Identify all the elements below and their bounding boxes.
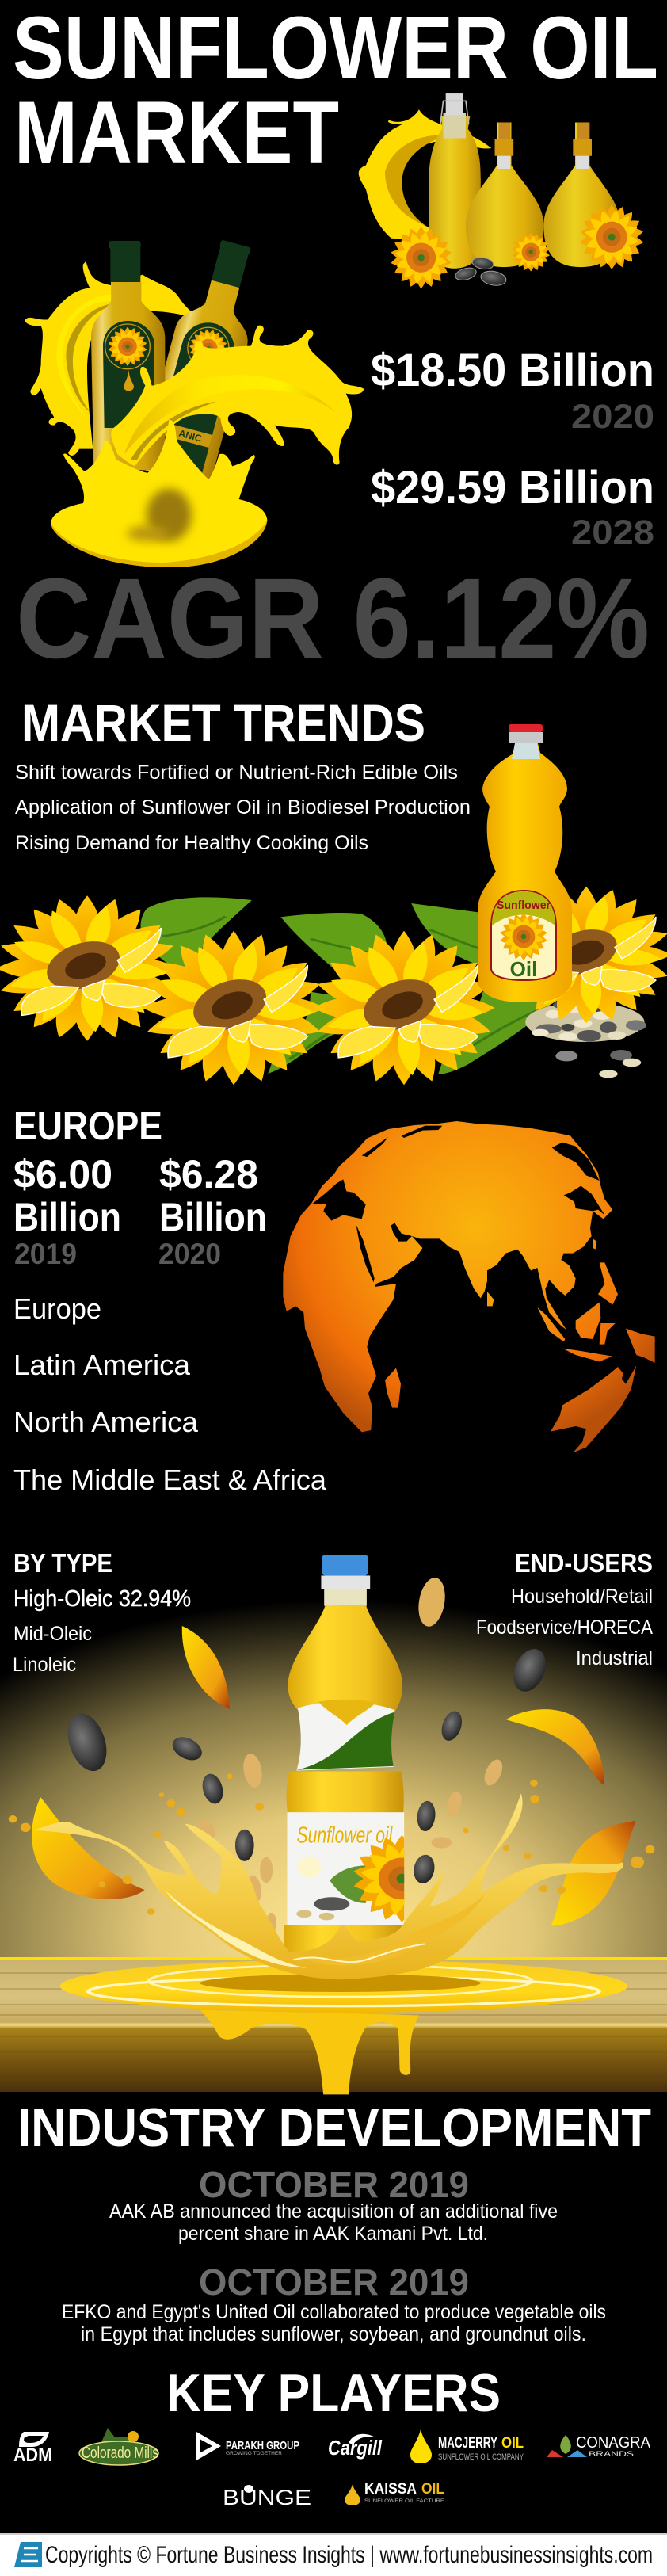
oil pool, drips and splash (34, 1793, 627, 2094)
seeds (61, 1645, 551, 1884)
plastic oil bottle (478, 724, 572, 1002)
bottle 1 (429, 93, 481, 269)
sunflowers (390, 205, 644, 288)
Europe value 2019 (13, 1152, 121, 1270)
logo: Colorado Mills: Colorado Mills (82, 2444, 158, 2462)
market trends list: Application of Sunflower Oil in Biodiesel Production (15, 796, 471, 819)
wooden table (0, 1957, 667, 2092)
by type segment: BY TYPE (13, 1548, 112, 1578)
market trends list: Rising Demand for Healthy Cooking Oils (15, 832, 368, 854)
region list: The Middle East & Africa (13, 1464, 327, 1496)
Europe value 2019: $6.00 (13, 1152, 112, 1196)
first bottle (91, 241, 165, 470)
oil pool (60, 1960, 627, 2013)
heading: key players: KEY PLAYERS (166, 2363, 501, 2423)
logo: MacJerry Oil: OIL (501, 2435, 524, 2452)
footer (0, 2533, 667, 2576)
seed pile (525, 997, 646, 1078)
logo: Kaissa Oil: OIL (421, 2481, 444, 2498)
region list (13, 1292, 327, 1496)
logo: Conagra Brands: CONAGRA (576, 2434, 651, 2452)
second bottle (138, 234, 272, 487)
market size 2020: 2020 (571, 398, 654, 436)
seeds (454, 256, 507, 288)
development 1: AAK AB announced the acquisition of an additional five (109, 2200, 558, 2223)
Sri Lanka and South East Asian islands (487, 1238, 655, 1363)
region list: Latin America (13, 1349, 191, 1381)
logo: Kaissa Oil (345, 2481, 444, 2505)
globe (283, 1121, 655, 1452)
end-users segment: Industrial (576, 1647, 653, 1670)
development 1 (109, 2164, 558, 2245)
logo: Conagra Brands (547, 2434, 651, 2458)
market size 2028 (371, 462, 654, 551)
bottle 3 (543, 122, 620, 267)
plastic bottle: Sunflower oil (297, 1822, 393, 1848)
logo: MacJerry Oil: SUNFLOWER OIL COMPANY (438, 2452, 524, 2462)
logo: Parakh Group: GROWING TOGETHER (226, 2452, 283, 2456)
Europe value 2019: Billion (13, 1195, 121, 1239)
market size 2020: $18.50 Billion (371, 345, 654, 396)
flowers (494, 882, 667, 1027)
development 2: in Egypt that includes sunflower, soybean, and groundnut oils. (81, 2323, 586, 2345)
logo: Parakh Group (196, 2432, 299, 2460)
logo: Colorado Mills (79, 2428, 158, 2465)
Europe value 2020: Billion (159, 1195, 267, 1239)
by type segment (13, 1548, 191, 1676)
logo: Parakh Group: PARAKH GROUP (226, 2439, 299, 2452)
heading: market trends: MARKET TRENDS (21, 693, 425, 752)
by type segment: High-Oleic 32.94% (13, 1586, 191, 1612)
logo: Kaissa Oil: KAISSA (364, 2481, 417, 2498)
Europe value 2020: $6.28 (159, 1152, 258, 1196)
market trends list: Shift towards Fortified or Nutrient-Rich Edible Oils (15, 761, 458, 784)
splash arc (111, 326, 364, 466)
logo: MacJerry Oil (410, 2429, 524, 2463)
logo: ADM (13, 2432, 52, 2466)
development 2 (62, 2261, 606, 2345)
regional heading: Europe: EUROPE (13, 1104, 162, 1148)
Europe value 2019: 2019 (14, 1238, 77, 1270)
logo: Cargill: Cargill (328, 2436, 383, 2460)
by type segment: Linoleic (13, 1654, 76, 1676)
illustration: dark oil bottles in golden splash (25, 234, 364, 567)
market trends list (15, 761, 471, 854)
black band below table (0, 2091, 582, 2093)
region list: Europe (13, 1292, 101, 1325)
illustration: three glass oil bottles with sunflowers (359, 93, 644, 288)
plastic oil bottle: Oil (510, 957, 537, 981)
droplets (9, 1773, 654, 1915)
logo: Conagra Brands: BRANDS (589, 2450, 634, 2458)
Africa and Eurasia landmass (283, 1121, 612, 1432)
plastic bottle (284, 1555, 404, 1952)
swirl behind bottles (25, 261, 194, 456)
Europe value 2020 (158, 1152, 267, 1270)
development 1: OCTOBER 2019 (199, 2164, 469, 2205)
market size 2020 (371, 345, 654, 436)
illustration: sunflower row (0, 724, 667, 1090)
kernels (196, 1753, 506, 1934)
band on second bottle: ANIC (177, 428, 203, 445)
logo: ADM: ADM (13, 2444, 52, 2466)
petals (32, 1576, 636, 1926)
crown splash and pool (51, 420, 267, 567)
title (13, 0, 658, 182)
logo: Kaissa Oil: SUNFLOWER OIL FACTURE (364, 2499, 444, 2504)
swirl of oil (359, 109, 491, 241)
Europe value 2020: 2020 (158, 1238, 221, 1270)
plastic oil bottle: Sunflower (497, 899, 551, 912)
bottle 2 (466, 122, 543, 267)
development 1: percent share in AAK Kamani Pvt. Ltd. (178, 2223, 488, 2245)
band on second bottle (158, 422, 212, 448)
footer logo (14, 2542, 42, 2567)
illustration: bottle, petals and seeds (9, 1555, 654, 1967)
leaves (141, 897, 553, 1074)
end-users segment: END-USERS (515, 1548, 653, 1578)
Madagascar (385, 1368, 401, 1408)
market size 2028: 2028 (571, 513, 654, 551)
logo: MacJerry Oil: MACJERRY (438, 2435, 497, 2452)
seas (311, 1126, 604, 1282)
development 2: EFKO and Egypt's United Oil collaborated to produce vegetable oils (62, 2301, 606, 2323)
Australia (551, 1365, 636, 1452)
development 2: OCTOBER 2019 (199, 2261, 469, 2303)
drips (200, 2010, 419, 2094)
market size 2028: $29.59 Billion (371, 462, 654, 513)
splash (34, 1793, 623, 1979)
by type segment: Mid-Oleic (13, 1623, 92, 1645)
segment background glow (0, 1585, 667, 1965)
logo: Bunge: BUNGE (223, 2486, 311, 2509)
end-users segment (476, 1548, 653, 1670)
title: MARKET (14, 83, 339, 182)
region list: North America (13, 1406, 199, 1438)
end-users segment: Household/Retail (511, 1586, 653, 1608)
